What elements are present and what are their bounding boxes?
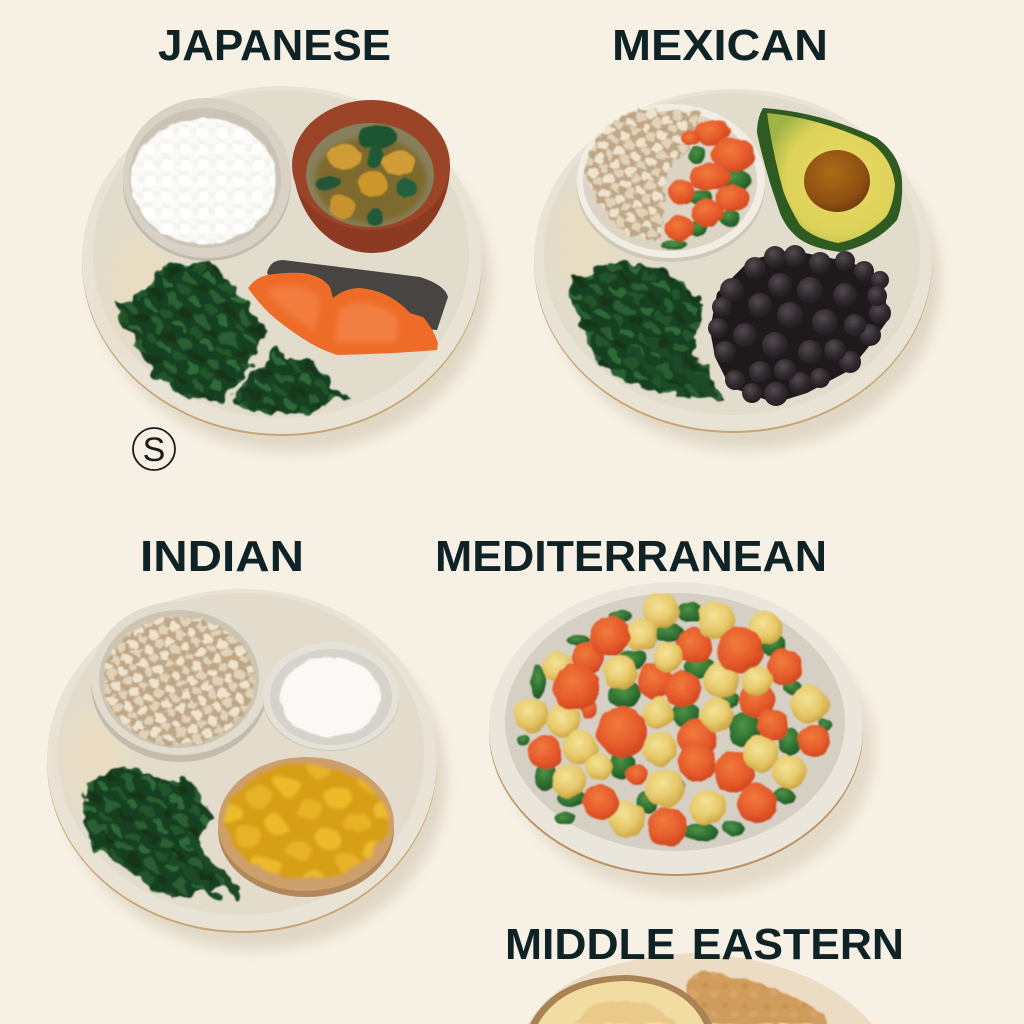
spinach: [115, 262, 348, 415]
plate: Mexican: [534, 89, 940, 450]
rice and tomato bowl: [577, 104, 765, 262]
soup chunks: [316, 125, 416, 226]
lentil bowl: [91, 601, 269, 762]
panel: Japanese meal: [82, 21, 490, 470]
plate: Japanese: [82, 86, 490, 452]
dal bowl: [218, 757, 394, 897]
orange pieces, under layer: [528, 628, 830, 792]
miso soup bowl: [292, 100, 450, 253]
yogurt bowl: [263, 642, 399, 751]
heading: Middle Eastern: MIDDLE EASTERN: [505, 920, 904, 969]
bowl: Mediterranean: [489, 582, 874, 895]
panel: Indian meal: [47, 532, 446, 950]
flatbread: [687, 971, 827, 1024]
heading: Indian: INDIAN: [140, 532, 304, 581]
icon: S in circle: S: [143, 431, 165, 469]
yogurt: [280, 657, 380, 737]
heading: Mediterranean: MEDITERRANEAN: [435, 532, 827, 581]
rice bowl: [123, 98, 291, 261]
heading: Japanese: JAPANESE: [158, 21, 391, 70]
spinach: [570, 260, 722, 398]
rice: [131, 118, 277, 244]
yellow pieces: [514, 593, 829, 837]
plate: Indian: [47, 589, 446, 950]
plate: Middle Eastern: [528, 953, 872, 1024]
panel: Middle Eastern meal: [505, 920, 904, 1024]
hummus bowl: [530, 975, 712, 1024]
heading: Mexican: MEXICAN: [612, 21, 828, 70]
panel: Mexican meal: [534, 21, 940, 450]
avocado: [757, 108, 902, 252]
panel: Mediterranean meal: [435, 532, 874, 895]
green pieces: [517, 602, 832, 841]
salmon skin: [267, 260, 448, 330]
tomatoes and peppers: [662, 119, 755, 250]
salmon flesh: [248, 273, 438, 355]
lentils: [104, 617, 254, 745]
brown rice: [586, 109, 702, 243]
spinach: [83, 763, 238, 900]
icon: S in circle: [133, 428, 175, 470]
salmon: [248, 260, 448, 355]
orange pieces, top layer: [553, 616, 777, 847]
avocado pit: [804, 150, 870, 212]
vegetable salad: [514, 593, 832, 847]
black beans: [708, 245, 891, 406]
